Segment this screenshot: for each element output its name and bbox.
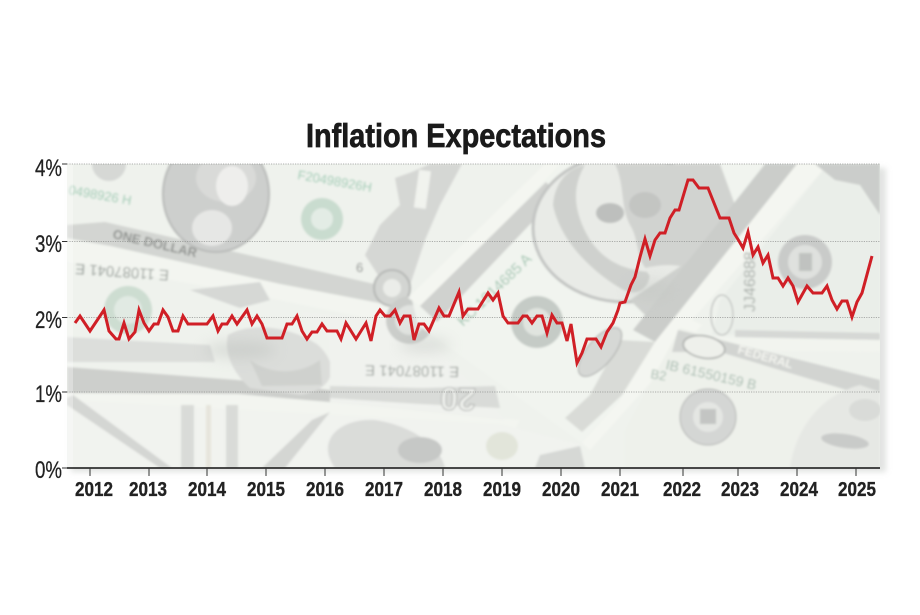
x axis line, ticks and year labels: 2021 [601, 479, 639, 501]
y axis labels and ticks [35, 155, 67, 484]
bill: one dollar, top left: ONE DOLLAR [111, 226, 199, 260]
bill: fifty with Grant, bottom right: FEDERAL [736, 342, 795, 372]
x axis line, ticks and year labels: 2020 [542, 479, 580, 501]
x axis line, ticks and year labels: 2015 [247, 479, 285, 501]
y axis labels and ticks: 2% [35, 307, 62, 334]
panel: currency photo background [67, 136, 881, 468]
x axis line, ticks and year labels: 2024 [780, 479, 819, 501]
x axis line, ticks and year labels: 2019 [483, 479, 521, 501]
x axis line, ticks and year labels: 2013 [129, 479, 167, 501]
soft shadows between bills [204, 280, 672, 358]
x axis line, ticks and year labels: 2017 [365, 479, 403, 501]
bill: upside-down twenty, left [67, 262, 331, 402]
title: Inflation Expectations [306, 117, 606, 154]
y axis labels and ticks: 4% [35, 155, 62, 182]
portrait: Jackson, centre left [227, 327, 331, 395]
y axis labels and ticks: 0% [35, 457, 62, 484]
bill: one dollar, top left: F20498926H [296, 167, 373, 195]
bill: hundred with Franklin, centre right [408, 164, 796, 432]
bill: one dollar, top left: 6 [356, 260, 363, 275]
bill: lower left Jackson portrait [67, 395, 585, 468]
bill: twenty with Jackson, centre [330, 298, 500, 412]
x axis line, ticks and year labels: 2014 [188, 479, 227, 501]
bill: one dollar, top left: 0498926 H [67, 182, 133, 208]
bill: twenty with Jackson, centre: 20 [440, 380, 476, 418]
gridlines [67, 164, 880, 392]
bill: hundred with Franklin, centre right: KC 1914685 A [454, 250, 535, 330]
x axis line, ticks and year labels: 2016 [306, 479, 344, 501]
y axis labels and ticks: 1% [35, 381, 62, 408]
bill: upside-down twenty, left: E 11087041 E [75, 260, 170, 283]
bill: fifty with Grant, bottom right: B2 [649, 366, 668, 384]
x axis line, ticks and year labels: 2023 [721, 479, 759, 501]
line chart: inflation expectations [75, 180, 872, 363]
bill: fifty with Grant, bottom right [650, 330, 880, 467]
bill: one dollar, top left [67, 164, 462, 308]
x axis line, ticks and year labels: 2022 [663, 479, 701, 501]
bill: federal reserve seal, top right [710, 164, 880, 340]
chart drop shadow [71, 168, 886, 472]
x axis line, ticks and year labels: 2025 [838, 479, 876, 501]
bill: fifty with Grant, bottom right: IB 61550159 B [664, 356, 758, 393]
x axis line, ticks and year labels: 2018 [424, 479, 462, 501]
x axis line, ticks and year labels: 2012 [75, 479, 113, 501]
x axis line, ticks and year labels [67, 468, 880, 501]
bill: federal reserve seal, top right: JJ46888 [742, 251, 759, 312]
y axis labels and ticks: 3% [35, 231, 62, 258]
bill: twenty with Jackson, centre: E 11087041 E [365, 361, 459, 380]
